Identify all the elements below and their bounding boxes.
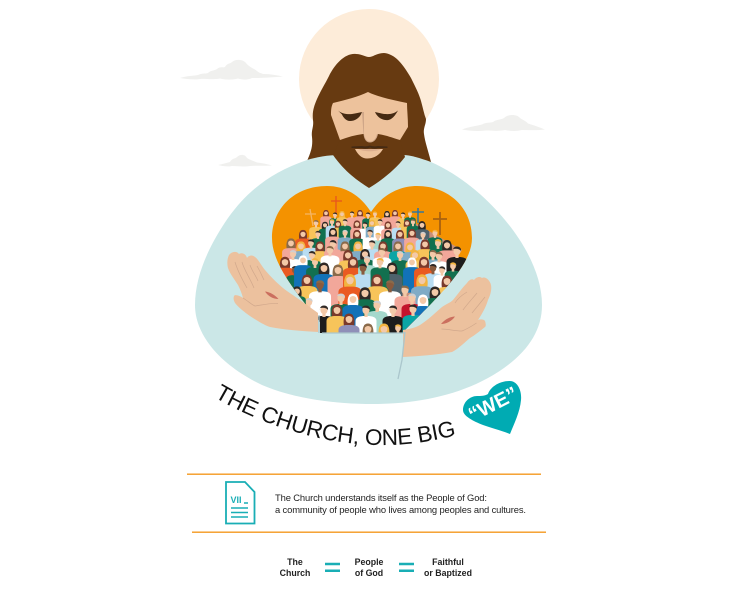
equation: the church: The: [287, 557, 303, 567]
equation: faithful or baptized: or Baptized: [424, 568, 472, 578]
figure: face: [331, 92, 408, 188]
left eye: [338, 110, 362, 121]
crowd: [280, 210, 466, 333]
divider top: [187, 474, 541, 475]
icon: document VII: [226, 482, 254, 524]
cloud: top right: [462, 115, 545, 131]
divider bottom: [192, 532, 546, 533]
equation: the church: Church: [280, 568, 310, 578]
lower lip: [355, 149, 383, 158]
left creases: [235, 262, 278, 306]
equation: people of god: [355, 557, 384, 578]
beard: [333, 134, 405, 188]
nose: [362, 112, 378, 142]
crosses: [305, 196, 447, 235]
equals sign 1: [325, 564, 340, 571]
sleeve folds: [319, 315, 405, 379]
right wound: [441, 316, 455, 324]
equation: faithful or baptized: [424, 557, 472, 578]
halo: [299, 9, 439, 149]
body text: a community of people who lives among peoples and cultures.: [275, 504, 526, 515]
equals sign 2: [399, 564, 414, 571]
icon: document VII: VII: [230, 495, 242, 505]
teal heart with WE: “WE”: [465, 383, 522, 426]
heart with crowd: [272, 186, 472, 333]
equation: people of god: of God: [355, 568, 383, 578]
left hand: [227, 252, 318, 332]
right hand: [403, 277, 491, 357]
body text: The Church understands itself as the People of God:: [275, 492, 487, 503]
left wound: [265, 292, 278, 299]
right creases: [442, 292, 485, 331]
orange heart: [272, 186, 472, 333]
right eye: [375, 110, 398, 120]
figure: robe: [195, 155, 542, 404]
figure: hair: [307, 53, 431, 170]
equation: the church: [280, 557, 310, 578]
moustache line: [352, 146, 388, 149]
title: curved text: THE CHURCH, ONE BIG: [219, 384, 454, 447]
body text: [275, 492, 526, 515]
cloud: top left: [180, 60, 283, 80]
face skin: [331, 92, 408, 140]
equation: faithful or baptized: Faithful: [432, 557, 464, 567]
equation: people of god: People: [355, 557, 384, 567]
cloud: lower left: [218, 155, 272, 166]
